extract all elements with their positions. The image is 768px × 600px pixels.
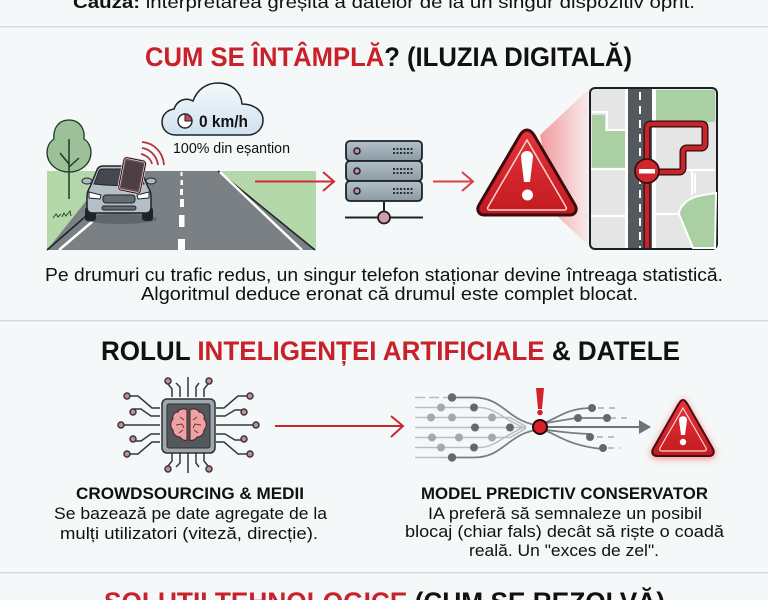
heading: cum se întâmplă: CUM SE ÎNTÂMPLĂ? (ILUZIA DIGITALĂ) xyxy=(145,41,632,72)
icon: small warning triangle xyxy=(651,398,715,458)
heading: rolul IA: ROLUL INTELIGENȚEI ARTIFICIALE & DATELE xyxy=(101,336,680,366)
icon: exclamation mark xyxy=(536,388,544,415)
chart: data funnel xyxy=(415,388,651,462)
icon: pie gauge xyxy=(178,114,192,128)
zoom cone xyxy=(540,88,590,247)
body text xyxy=(45,264,723,304)
body text: Pe drumuri cu trafic redus, un singur telefon staționar devine întreaga statistică. xyxy=(45,264,723,285)
map panel xyxy=(590,88,717,249)
icon: warning triangle xyxy=(478,130,576,215)
speed label: 0 km/h xyxy=(199,113,248,131)
text block: model predictiv: reală. Un "exces de zel". xyxy=(469,542,659,560)
text block: model predictiv: blocaj (chiar fals) decât să riște o coadă xyxy=(405,523,725,541)
text block: crowdsourcing xyxy=(54,485,328,543)
brain xyxy=(171,409,206,440)
icon: car xyxy=(82,166,157,224)
arrow: road to server xyxy=(255,172,335,191)
text block: model predictiv: IA preferă să semnaleze un posibil xyxy=(428,505,702,523)
sample label: 100% din eșantion xyxy=(173,141,290,157)
cloud callout xyxy=(162,83,290,157)
text block: model predictiv: MODEL PREDICTIV CONSERVATOR xyxy=(421,485,708,503)
icon: phone xyxy=(118,157,146,194)
body text: Algoritmul deduce eronat că drumul este complet blocat. xyxy=(141,283,638,304)
text block: crowdsourcing: CROWDSOURCING & MEDII xyxy=(76,485,304,503)
arrow: chip to model xyxy=(275,416,403,437)
text block: crowdsourcing: Se bazează pe date agregate de la xyxy=(54,505,328,523)
text block: crowdsourcing: mulți utilizatori (viteză, direcție). xyxy=(60,525,318,543)
illustration: road with car xyxy=(47,120,316,250)
arrow: server to warning xyxy=(433,172,473,191)
icon: signal waves xyxy=(141,142,164,165)
route highlight xyxy=(647,124,705,248)
icon: server xyxy=(345,141,423,224)
text block: model predictiv xyxy=(405,485,725,560)
icon: no entry xyxy=(635,159,659,183)
icon: AI chip with brain xyxy=(118,377,259,473)
icon: tree xyxy=(47,120,91,218)
